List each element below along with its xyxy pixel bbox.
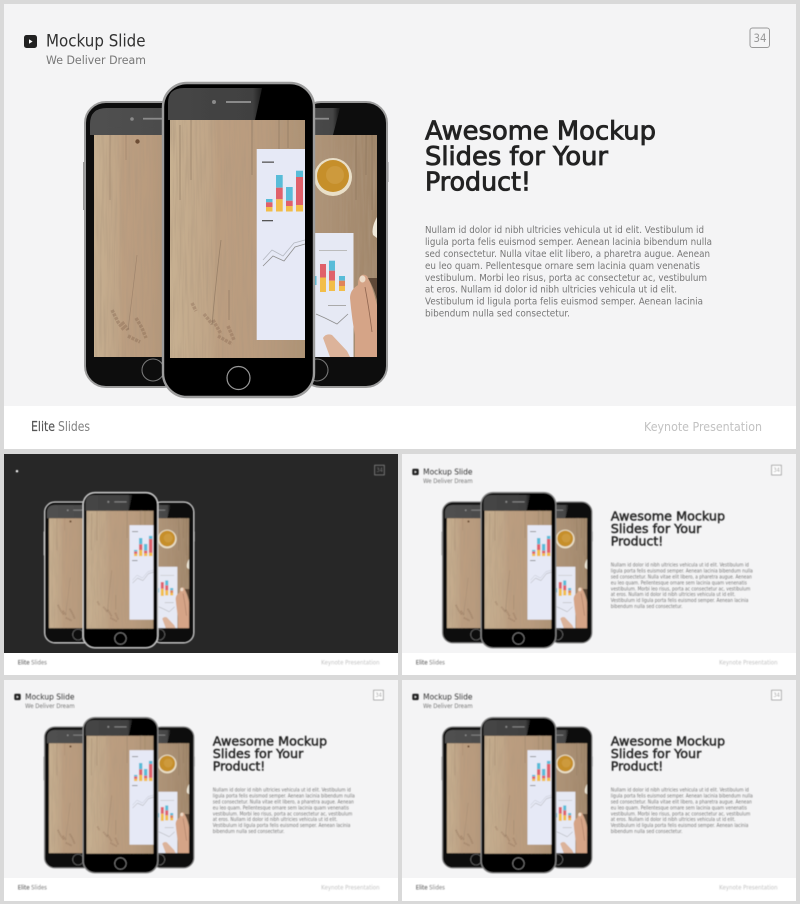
footer brand: Elite	[31, 420, 55, 435]
footer brand	[18, 659, 47, 667]
subtitle: We Deliver Dream	[423, 479, 473, 485]
body text: at eros. Nullam id dolor id nibh ultricies vehicula ut id elit.	[425, 285, 677, 296]
body text: eu leo quam. Pellentesque ornare sem lacinia quam venenatis	[425, 261, 700, 272]
footer brand	[416, 659, 445, 667]
page number badge	[750, 28, 770, 48]
page number badge: 34	[376, 468, 383, 474]
footer brand: Slides	[31, 659, 47, 667]
body text	[213, 788, 355, 835]
body text: Nullam id dolor id nibh ultricies vehicula ut id elit. Vestibulum id	[611, 788, 749, 794]
footer brand: Slides	[31, 884, 47, 892]
footer label: Keynote Presentation	[321, 885, 380, 892]
heading: Slides for Your	[425, 142, 608, 172]
heading: Awesome Mockup	[611, 733, 725, 748]
panel: dark slide	[4, 454, 398, 675]
heading: Product!	[213, 759, 265, 774]
footer brand	[18, 884, 47, 892]
title: Mockup Slide: Mockup Slide	[46, 32, 146, 50]
footer label: Keynote Presentation	[719, 660, 778, 667]
footer brand: Elite	[18, 884, 30, 892]
body text: eu leo quam. Pellentesque ornare sem lacinia quam venenatis	[611, 580, 747, 586]
body text	[425, 225, 712, 320]
body text: Nullam id dolor id nibh ultricies vehicula ut id elit. Vestibulum id	[213, 788, 351, 794]
body text: at eros. Nullam id dolor id nibh ultricies vehicula ut id elit.	[611, 817, 736, 823]
heading: Product!	[611, 534, 663, 549]
body text: Vestibulum id ligula porta felis euismod semper. Aenean lacinia	[611, 823, 748, 829]
phone mockups	[43, 492, 195, 648]
phone mockups	[441, 717, 593, 873]
subtitle: We Deliver Dream	[423, 704, 473, 710]
footer label: Keynote Presentation	[719, 885, 778, 892]
phone mockups	[83, 83, 388, 397]
icon: play badge	[14, 694, 21, 700]
body text: ligula porta felis euismod semper. Aenean lacinia bibendum nulla	[611, 794, 753, 800]
body text: Vestibulum id ligula porta felis euismod semper. Aenean lacinia	[213, 823, 350, 829]
body text: sed consectetur. Nulla vitae elit libero, a pharetra augue. Aenean	[611, 575, 752, 581]
footer label: Keynote Presentation	[644, 419, 762, 434]
panel: top-right small slide	[402, 454, 796, 675]
page number badge	[374, 690, 383, 700]
body text: bibendum nulla sed consectetur.	[425, 308, 570, 320]
page number badge	[375, 465, 384, 475]
heading	[611, 733, 725, 774]
panel: bottom-right small slide	[402, 680, 796, 901]
heading: Slides for Your	[213, 746, 304, 761]
heading: Product!	[611, 759, 663, 774]
footer brand: Slides	[58, 420, 90, 435]
body text	[611, 563, 753, 610]
icon: play badge	[412, 694, 419, 700]
body text: ligula porta felis euismod semper. Aenean lacinia bibendum nulla	[611, 569, 753, 575]
white dot	[16, 470, 18, 472]
page number badge	[772, 465, 781, 475]
body text: Nullam id dolor id nibh ultricies vehicula ut id elit. Vestibulum id	[425, 225, 704, 236]
phone mockups	[43, 717, 195, 873]
body text: at eros. Nullam id dolor id nibh ultricies vehicula ut id elit.	[611, 592, 736, 598]
heading: Slides for Your	[611, 521, 702, 536]
body text: sed consectetur. Nulla vitae elit libero, a pharetra augue. Aenean	[611, 800, 752, 806]
heading	[611, 508, 725, 549]
footer brand: Elite	[18, 659, 30, 667]
footer brand: Slides	[429, 884, 445, 892]
subtitle: We Deliver Dream	[25, 704, 75, 710]
footer brand	[416, 884, 445, 892]
panel: main slide	[4, 4, 796, 449]
body text: eu leo quam. Pellentesque ornare sem lacinia quam venenatis	[213, 805, 349, 811]
body text: sed consectetur. Nulla vitae elit libero, a pharetra augue. Aenean	[425, 249, 710, 260]
title: Mockup Slide: Mockup Slide	[25, 691, 74, 701]
body text: ligula porta felis euismod semper. Aenean lacinia bibendum nulla	[425, 237, 712, 248]
footer brand	[31, 420, 90, 435]
subtitle: We Deliver Dream	[46, 53, 146, 67]
heading	[425, 116, 656, 198]
phone mockups	[441, 492, 593, 648]
body text: vestibulum. Morbi leo risus, porta ac consectetur ac, vestibulum	[611, 586, 751, 592]
page number badge: 34	[773, 693, 780, 699]
title: Mockup Slide: Mockup Slide	[423, 466, 472, 476]
heading: Awesome Mockup	[213, 733, 327, 748]
body text: ligula porta felis euismod semper. Aenean lacinia bibendum nulla	[213, 794, 355, 800]
body text: vestibulum. Morbi leo risus, porta ac consectetur ac, vestibulum	[213, 811, 353, 817]
body text: bibendum nulla sed consectetur.	[213, 829, 285, 835]
body text: sed consectetur. Nulla vitae elit libero, a pharetra augue. Aenean	[213, 800, 354, 806]
body text	[611, 788, 753, 835]
title: Mockup Slide: Mockup Slide	[423, 691, 472, 701]
heading: Product!	[425, 168, 531, 198]
body text: vestibulum. Morbi leo risus, porta ac consectetur ac, vestibulum	[611, 811, 751, 817]
body text: vestibulum. Morbi leo risus, porta ac consectetur ac, vestibulum	[425, 273, 707, 284]
body text: at eros. Nullam id dolor id nibh ultricies vehicula ut id elit.	[213, 817, 338, 823]
icon: play badge	[24, 35, 37, 48]
body text: Vestibulum id ligula porta felis euismod semper. Aenean lacinia	[611, 598, 748, 604]
footer brand: Slides	[429, 659, 445, 667]
icon: play badge	[412, 469, 419, 475]
body text: Nullam id dolor id nibh ultricies vehicula ut id elit. Vestibulum id	[611, 563, 749, 569]
page number badge: 34	[754, 31, 766, 45]
panel: bottom-left small slide	[4, 680, 398, 901]
heading: Awesome Mockup	[425, 116, 656, 146]
page number badge	[772, 690, 781, 700]
body text: Vestibulum id ligula porta felis euismod semper. Aenean lacinia	[425, 297, 703, 308]
heading: Slides for Your	[611, 746, 702, 761]
body text: bibendum nulla sed consectetur.	[611, 829, 683, 835]
footer brand: Elite	[416, 884, 428, 892]
body text: eu leo quam. Pellentesque ornare sem lacinia quam venenatis	[611, 805, 747, 811]
heading: Awesome Mockup	[611, 508, 725, 523]
footer label: Keynote Presentation	[321, 660, 380, 667]
footer brand: Elite	[416, 659, 428, 667]
page number badge: 34	[375, 693, 382, 699]
heading	[213, 733, 327, 774]
page number badge: 34	[773, 468, 780, 474]
body text: bibendum nulla sed consectetur.	[611, 604, 683, 610]
